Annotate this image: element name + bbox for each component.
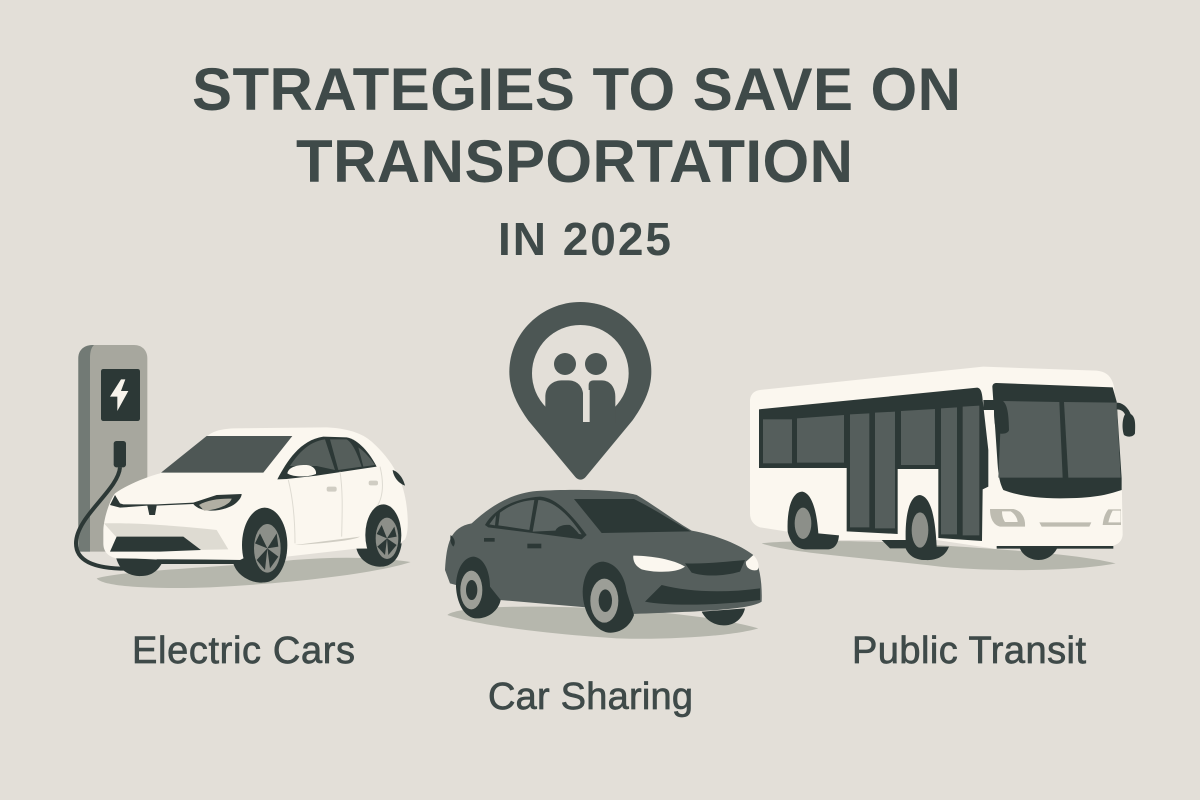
illustration: public transit bus bbox=[750, 367, 1135, 570]
shadow: shared car bbox=[447, 607, 758, 639]
icon: location pin with people bbox=[509, 302, 651, 480]
wheel: shared car front bbox=[583, 562, 634, 633]
label: car sharing: Car Sharing bbox=[488, 676, 693, 718]
label: electric cars: Electric Cars bbox=[132, 630, 355, 672]
car body: electric car bbox=[103, 427, 408, 576]
side windows bbox=[759, 388, 988, 541]
wheel: shared car rear bbox=[456, 557, 501, 618]
title bbox=[192, 56, 961, 195]
shadow: bus bbox=[762, 541, 1116, 570]
illustration: electric car with charger bbox=[76, 345, 411, 588]
icon: charging cable bbox=[76, 467, 127, 569]
illustration: car sharing bbox=[445, 302, 762, 639]
icon: right mirror bbox=[1117, 403, 1135, 437]
windshield bbox=[992, 383, 1122, 498]
bus body bbox=[750, 367, 1123, 560]
wheel: electric car rear bbox=[365, 504, 401, 566]
wheel: bus rear bbox=[788, 492, 839, 549]
subtitle: IN 2025 bbox=[498, 213, 671, 265]
wheel: bus front bbox=[882, 495, 949, 560]
icon: charging station bbox=[78, 345, 147, 552]
label: public transit: Public Transit bbox=[852, 630, 1086, 672]
car body: shared car bbox=[445, 490, 762, 625]
icon: left mirror bbox=[983, 400, 1009, 434]
shadow: electric car bbox=[97, 558, 411, 588]
wheel: electric car front bbox=[233, 508, 287, 583]
title: TRANSPORTATION bbox=[296, 128, 853, 195]
title: STRATEGIES TO SAVE ON bbox=[192, 56, 961, 123]
bus lights and grille bbox=[990, 509, 1121, 527]
